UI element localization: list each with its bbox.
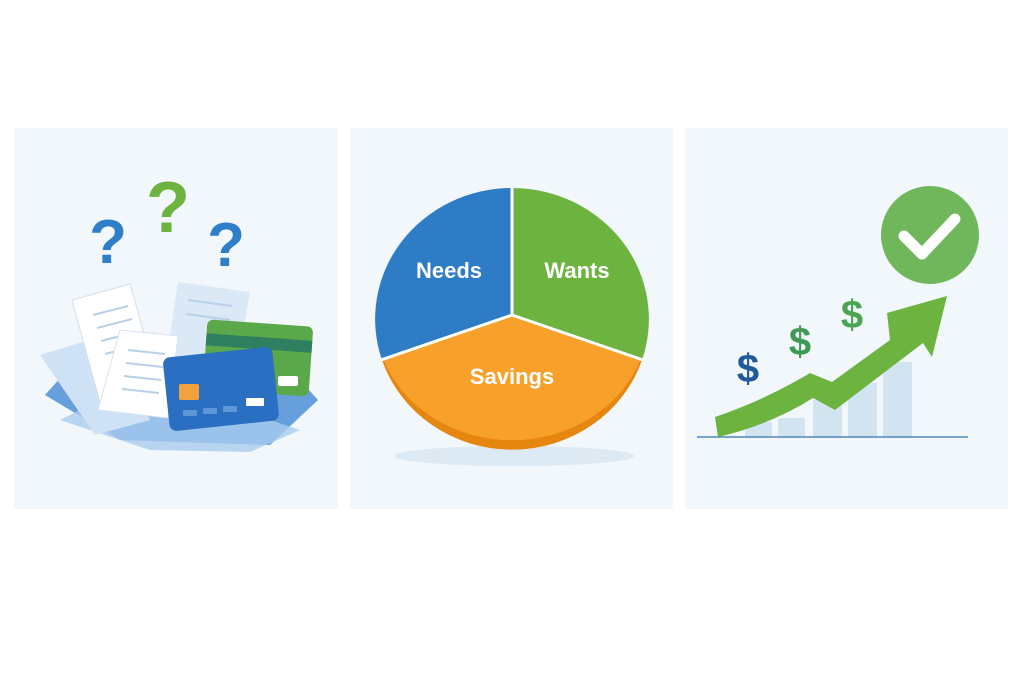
panel: confusion — [14, 128, 338, 509]
icon: question marks: ? — [207, 211, 245, 280]
arrow: growth — [715, 296, 947, 437]
icon: question marks — [89, 168, 245, 280]
panel: budget pie — [350, 128, 673, 509]
icon: dollar signs — [737, 293, 863, 391]
pie chart: Needs — [416, 258, 482, 283]
icon: check circle — [881, 186, 979, 284]
icon: question marks: ? — [89, 208, 127, 277]
panel: growth — [685, 128, 1008, 509]
icon: dollar signs: $ — [737, 347, 759, 391]
pie chart: Savings — [470, 364, 554, 389]
pie chart: Wants — [544, 258, 610, 283]
pie chart — [375, 188, 649, 466]
icon: dollar signs: $ — [841, 293, 863, 337]
bar chart — [745, 362, 912, 437]
icon: question marks: ? — [146, 168, 190, 248]
icon: bills and cards — [40, 282, 318, 452]
icon: dollar signs: $ — [789, 320, 811, 364]
